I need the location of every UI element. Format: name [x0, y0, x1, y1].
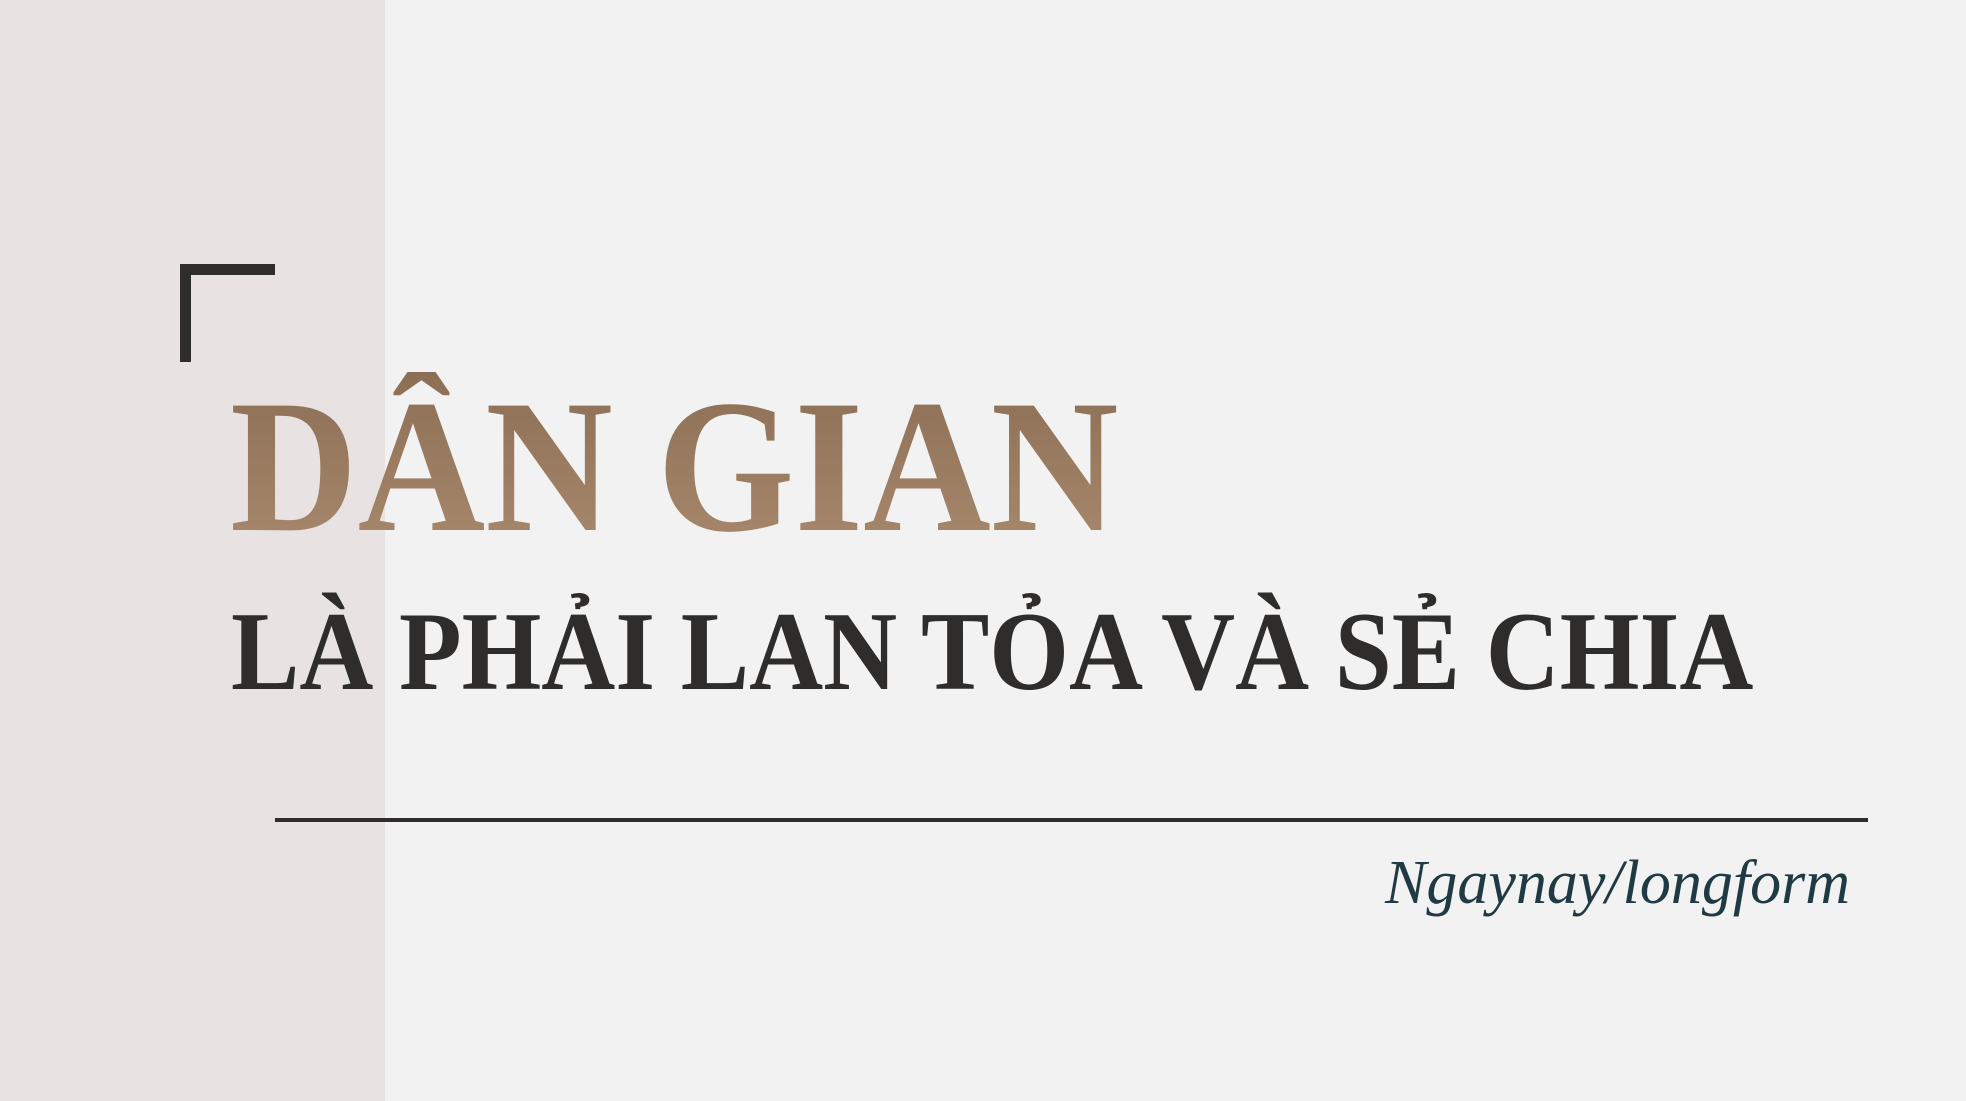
subtitle: LÀ PHẢI LAN TỎA VÀ SẺ CHIA: LÀ PHẢI LAN TỎA VÀ SẺ CHIA: [231, 590, 1753, 714]
title: DÂN GIAN: DÂN GIAN: [230, 362, 1118, 572]
horizontal divider line: [275, 818, 1868, 822]
left panel background: [0, 0, 385, 1101]
signature: Ngaynay/longform: Ngaynay/longform: [1385, 849, 1850, 917]
corner bracket: [180, 264, 275, 362]
